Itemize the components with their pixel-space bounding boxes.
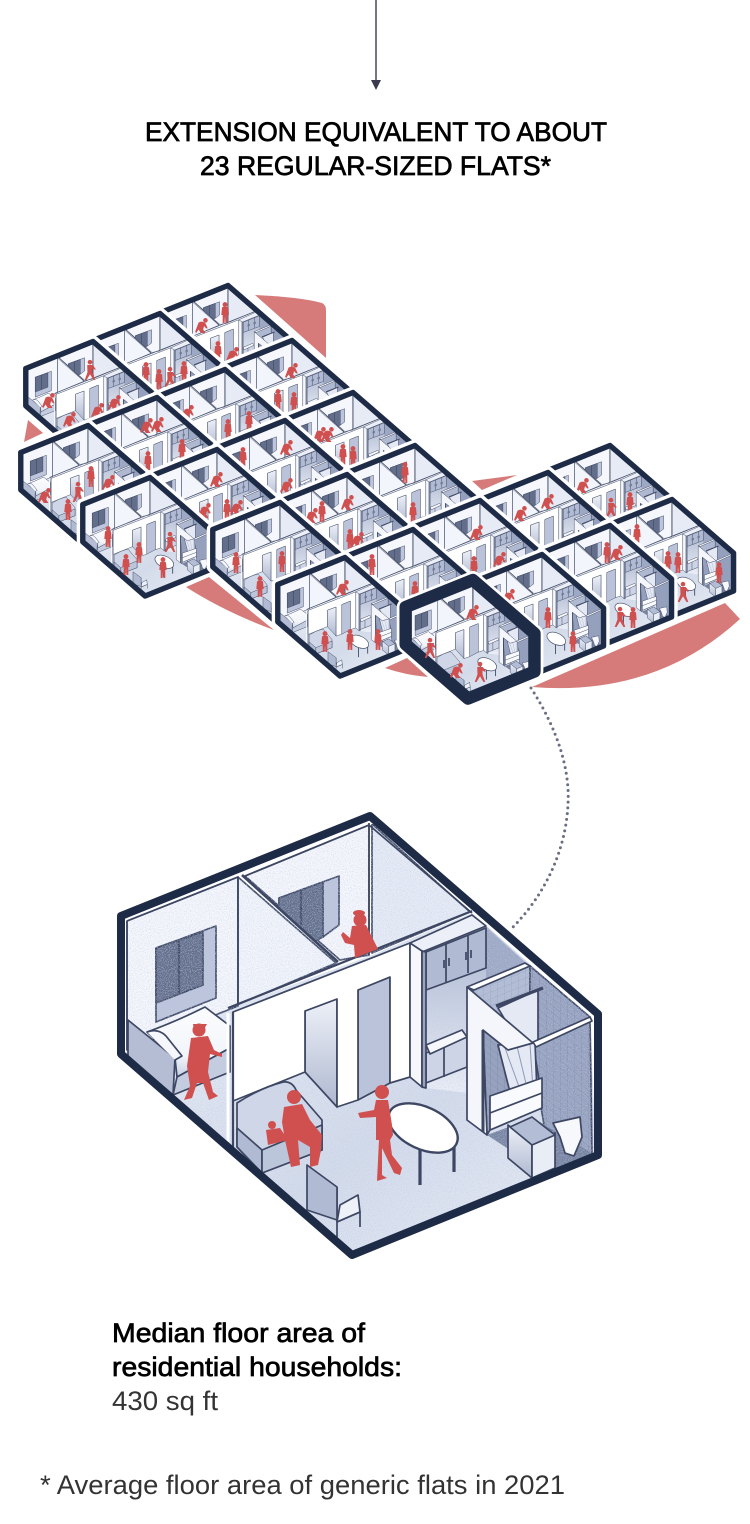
flat 3 <box>26 342 155 460</box>
flat 19 <box>475 555 604 673</box>
flat outline <box>121 816 598 1255</box>
person: woman in back room <box>341 910 378 958</box>
flat 11 <box>83 478 212 596</box>
flat grid: 23 regular flats <box>21 286 734 699</box>
flat 2 <box>93 314 222 432</box>
flat 17 <box>278 554 407 676</box>
person: woman by table <box>358 1085 402 1181</box>
pink footprint behind flats <box>24 295 740 688</box>
flat 16 <box>346 530 475 648</box>
enlarged flat cutaway <box>121 816 598 1255</box>
flat 8 <box>286 393 415 511</box>
title: 23 REGULAR-SIZED FLATS* <box>200 151 551 181</box>
flat 4 <box>225 341 354 459</box>
flat 20 <box>543 526 672 644</box>
flat 14 <box>348 446 477 564</box>
flat 10 <box>150 450 279 568</box>
flat 1 <box>161 286 290 404</box>
flat 6 <box>90 398 219 516</box>
flat 13 <box>213 503 342 621</box>
floor area text block <box>112 1318 402 1416</box>
floor area text block: residential households: <box>112 1352 402 1382</box>
flat 15 <box>413 501 542 619</box>
floor area text block: Median floor area of <box>112 1318 366 1348</box>
person: man walking by bed <box>184 1024 222 1100</box>
flat 12 <box>280 475 409 593</box>
footnote: * Average floor area of generic flats in 2021 <box>40 1470 565 1500</box>
flat 22 <box>543 446 672 564</box>
flat 23 <box>605 500 734 618</box>
flat 5 <box>158 370 287 488</box>
title <box>145 117 607 181</box>
highlighted flat 18 <box>406 580 534 699</box>
flat 9 <box>218 421 347 539</box>
person: seated man and child <box>266 1090 322 1167</box>
floor area text block: 430 sq ft <box>112 1386 219 1416</box>
title: EXTENSION EQUIVALENT TO ABOUT <box>145 117 607 147</box>
flat 21 <box>481 473 610 591</box>
arrow: pointing down to heading <box>371 0 381 90</box>
flat 7 <box>21 426 150 544</box>
dotted connector <box>512 688 568 928</box>
